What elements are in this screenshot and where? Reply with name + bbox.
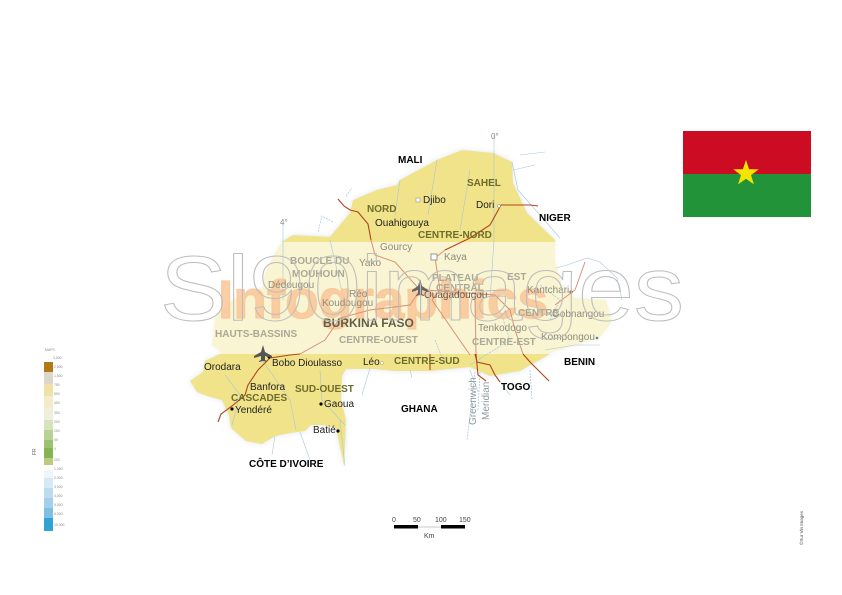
region labels: BURKINA FASO	[323, 316, 414, 330]
legend: elevation and depth scale: 2,500	[54, 365, 63, 369]
region labels: CENTRE-NORD	[418, 230, 492, 241]
city labels: Tenkodogo	[478, 323, 527, 334]
country labels	[249, 155, 595, 470]
legend: elevation and depth scale: 500	[54, 392, 60, 396]
watermark: Sl90images outline: Sl90images	[160, 238, 684, 340]
country labels: NIGER	[539, 213, 571, 224]
legend: elevation and depth scale: 300	[54, 411, 60, 415]
roads	[218, 199, 585, 422]
city labels: Réo	[349, 289, 368, 300]
credit: ©Sur Vin Images	[798, 510, 804, 545]
legend: elevation and depth scale: 200	[54, 420, 60, 424]
city labels: Gaoua	[324, 399, 354, 410]
legend: elevation and depth scale: FR	[32, 448, 38, 455]
country labels: CÔTE D’IVOIRE	[249, 457, 324, 470]
city labels: Kompongou	[541, 332, 595, 343]
city labels: Kantchari	[527, 285, 569, 296]
country labels: MALI	[398, 155, 423, 166]
city labels: Bobo Dioulasso	[272, 358, 342, 369]
legend: elevation and depth scale: 400	[54, 401, 60, 405]
scale bar: 50	[413, 517, 421, 524]
region labels: CASCADES	[231, 393, 287, 404]
legend: elevation and depth scale: 3,000	[54, 485, 63, 489]
legend: elevation and depth scale: 50	[54, 438, 58, 442]
scale bar: 0	[392, 517, 396, 524]
city labels: Gobnangou	[552, 309, 604, 320]
region labels: CENTRE-OUEST	[339, 335, 418, 346]
watermark band	[150, 242, 640, 354]
region labels: NORD	[367, 204, 396, 215]
city labels: Dori	[476, 200, 494, 211]
city labels: Koudougou	[322, 298, 373, 309]
country labels: TOGO	[501, 382, 530, 393]
city labels: Yako	[359, 258, 381, 269]
region labels: MOUHOUN	[292, 269, 345, 280]
rivers	[225, 135, 622, 466]
country labels: GHANA	[401, 404, 438, 415]
legend: elevation and depth scale: 750	[54, 383, 60, 387]
graticule labels	[280, 132, 499, 227]
region labels: CENTRE-SUD	[394, 356, 460, 367]
map: Burkina Faso territory	[150, 150, 640, 466]
graticule labels: 4°	[280, 218, 288, 227]
region labels	[215, 178, 559, 404]
legend: elevation and depth scale: 0	[54, 447, 56, 451]
country labels: BENIN	[564, 357, 595, 368]
legend: elevation and depth scale	[32, 348, 64, 531]
legend: elevation and depth scale: MAPS	[45, 348, 55, 352]
icon: airport Ouagadougou	[412, 279, 428, 296]
city labels: Ouahigouya	[375, 218, 429, 229]
legend: elevation and depth scale: 4,000	[54, 494, 63, 498]
scale bar	[392, 517, 471, 540]
region labels: PLATEAU	[432, 273, 478, 284]
north-east lobe outline	[495, 258, 622, 395]
meridian label: Meridian	[481, 382, 492, 420]
city labels: Banfora	[250, 382, 285, 393]
region labels: HAUTS-BASSINS	[215, 329, 298, 340]
city labels: Léo	[363, 357, 380, 368]
icon: airport Bobo Dioulasso	[254, 345, 272, 362]
city labels: Orodara	[204, 362, 241, 373]
icon: flag star	[733, 160, 759, 184]
city labels: Djibo	[423, 195, 446, 206]
city labels: Yendéré	[235, 405, 272, 416]
city labels: Gourcy	[380, 242, 412, 253]
legend: elevation and depth scale: 3,000	[53, 356, 62, 360]
legend: elevation and depth scale: 1,500	[54, 374, 63, 378]
legend: elevation and depth scale: 5,000	[54, 503, 63, 507]
meridian label	[468, 377, 492, 425]
legend: elevation and depth scale: 100	[54, 429, 60, 433]
scale bar: 100	[435, 517, 447, 524]
city labels: Batié	[313, 425, 336, 436]
city labels	[204, 195, 604, 436]
graticule labels: 0°	[491, 132, 499, 141]
city labels: Dédougou	[268, 280, 314, 291]
legend: elevation and depth scale: 6,000	[54, 512, 63, 516]
region labels: BOUCLE DU	[290, 256, 349, 267]
watermark: Infographics: Infographics	[218, 270, 548, 330]
meridian label: Greenwich	[468, 377, 479, 425]
region labels: SAHEL	[467, 178, 501, 189]
city labels: Kaya	[444, 252, 467, 263]
legend: elevation and depth scale: 1,000	[54, 467, 63, 471]
region labels: CENTRE	[518, 308, 559, 319]
legend: elevation and depth scale: 10,000	[54, 523, 64, 527]
scale bar: 150	[459, 517, 471, 524]
region labels: EST	[507, 272, 526, 283]
flag of Burkina Faso	[683, 131, 811, 217]
scale bar: Km	[424, 533, 435, 540]
region labels: SUD-OUEST	[295, 384, 354, 395]
region labels: CENTRAL	[436, 283, 484, 294]
city labels: Ouagadougou	[424, 290, 487, 301]
legend: elevation and depth scale: 2,000	[54, 476, 63, 480]
city markers	[230, 198, 598, 433]
legend: elevation and depth scale: 200	[54, 458, 60, 462]
region labels: CENTRE-EST	[472, 337, 536, 348]
